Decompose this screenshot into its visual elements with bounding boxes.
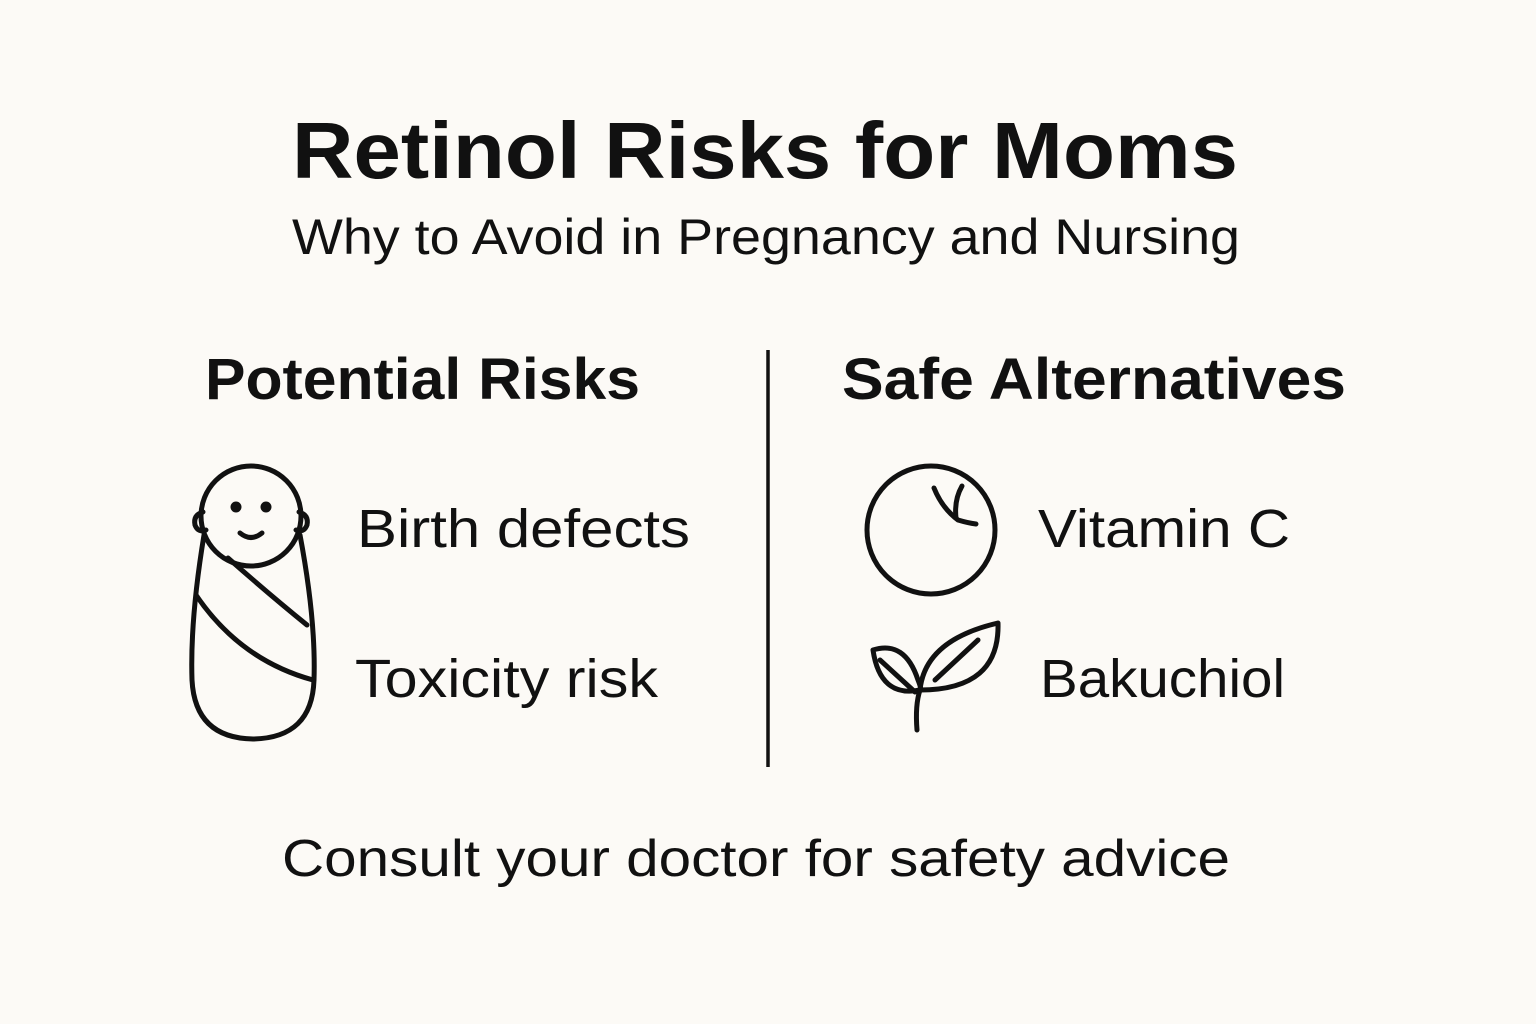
text: birth defects: Birth defects [357, 499, 690, 559]
icon: vitamin c citrus [867, 466, 995, 594]
text: toxicity risk: Toxicity risk [355, 649, 659, 709]
heading: potential risks: Potential Risks [205, 347, 640, 412]
icon: sprout leaf [873, 623, 998, 730]
title: Retinol Risks for Moms [292, 106, 1238, 195]
text: vitamin c: Vitamin C [1038, 499, 1290, 559]
text: bakuchiol: Bakuchiol [1040, 649, 1285, 709]
subtitle: Why to Avoid in Pregnancy and Nursing [292, 209, 1240, 265]
icon: swaddled baby [192, 466, 314, 739]
footer note: Consult your doctor for safety advice [282, 830, 1230, 888]
divider line [766, 350, 770, 767]
heading: safe alternatives: Safe Alternatives [842, 347, 1346, 412]
